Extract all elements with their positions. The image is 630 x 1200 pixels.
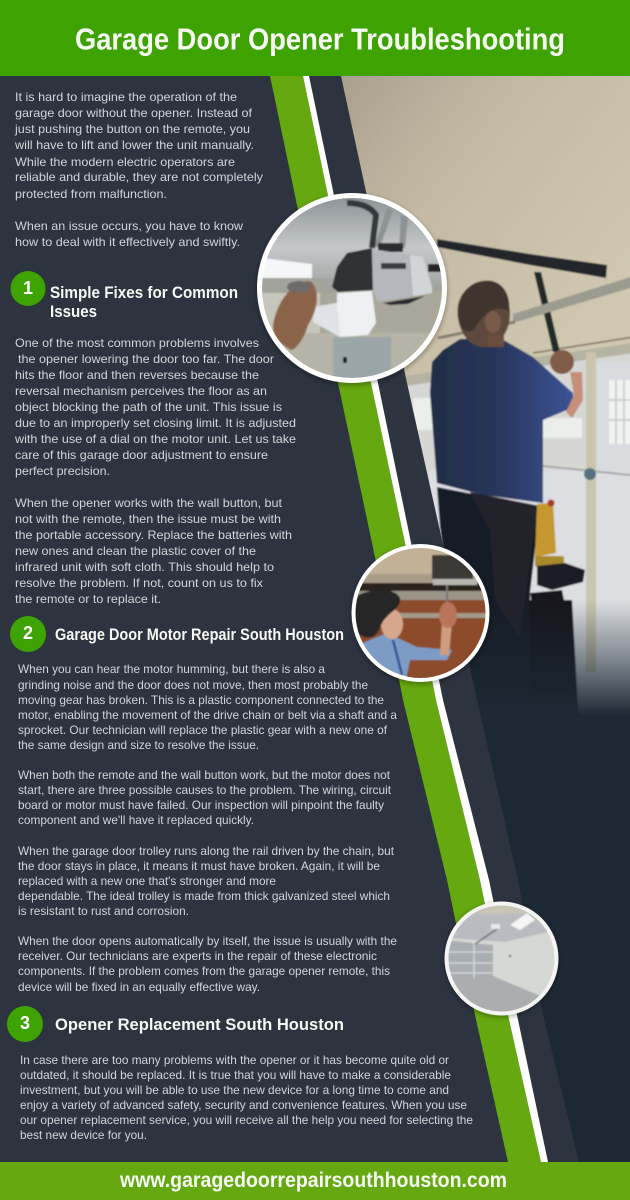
header bar bbox=[0, 0, 630, 76]
section 3 heading bbox=[7, 1006, 344, 1042]
section 3 body text: enjoy a variety of advanced safety, security and convenience features. When you use bbox=[20, 1098, 467, 1112]
section 1 body text: new ones and clean the plastic cover of the bbox=[15, 544, 256, 558]
section 1 body text: care of this garage door adjustment to ensure bbox=[15, 448, 268, 462]
section 2 body text: When the garage door trolley runs along the rail driven by the chain, but bbox=[18, 844, 395, 858]
section 3 body text: In case there are too many problems with the opener or it has become quite old or bbox=[20, 1053, 449, 1067]
section 1 body text: not with the remote, then the issue must be with bbox=[15, 512, 281, 526]
section 3 body text: investment, but you will be able to use the new device for a long time to come and bbox=[20, 1083, 449, 1097]
number badge 2: 2 bbox=[23, 623, 33, 643]
footer bar bbox=[0, 1162, 630, 1200]
heading text 1: Issues bbox=[50, 302, 97, 321]
section 1 body text: due to an improperly set closing limit. It is adjusted bbox=[15, 416, 296, 430]
intro text: just pushing the button on the remote, you bbox=[14, 122, 250, 136]
section 2 body text: When you can hear the motor humming, but there is also a bbox=[18, 662, 325, 676]
garage door rail bbox=[437, 239, 607, 278]
section 2 body text: the door stays in place, it means it must have broken. Again, it will be bbox=[18, 859, 380, 873]
intro text bbox=[14, 90, 263, 249]
section 1 body text: the remote or to replace it. bbox=[15, 592, 161, 606]
section 2 body text: grinding noise and the door does not move, then most probably the bbox=[18, 678, 368, 692]
number badge 3: 3 bbox=[20, 1013, 30, 1033]
section 1 body text: One of the most common problems involves bbox=[15, 336, 259, 350]
section 1 body text: reversal mechanism perceives the floor as an bbox=[15, 384, 267, 398]
section 2 body text: replaced with a new one that's stronger and more bbox=[18, 874, 276, 888]
section 2 body text: When both the remote and the wall button work, but the motor does not bbox=[18, 768, 391, 782]
tool belt bbox=[470, 492, 540, 640]
bottom fade over photo bbox=[470, 605, 630, 736]
section 1 heading bbox=[10, 271, 238, 321]
section 2 body text: device will be fixed in an equally effective way. bbox=[18, 980, 260, 994]
section 3 body text bbox=[20, 1053, 473, 1142]
white diagonal stripe bbox=[303, 76, 548, 1162]
green diagonal band bbox=[270, 76, 541, 1162]
photo circle 1: opener unit bbox=[250, 190, 455, 388]
forearm and hand bbox=[566, 372, 583, 418]
section 2 body text: is resistant to rust and corrosion. bbox=[18, 904, 189, 918]
intro text: garage door without the opener. Instead of bbox=[15, 106, 253, 120]
section 1 body text: object blocking the path of the unit. This issue is bbox=[15, 400, 282, 414]
section 1 body text: resolve the problem. If not, count on us to fix bbox=[15, 576, 263, 590]
section 1 body text: hits the floor and then reverses because the bbox=[15, 368, 259, 382]
number badge 1: 1 bbox=[23, 278, 33, 298]
ladder and pouches behind bbox=[528, 599, 578, 711]
section 3 body text: our opener replacement service, you will receive all the help you need for selecting the bbox=[20, 1113, 473, 1127]
shirt bbox=[430, 338, 574, 503]
section 3 body text: best new device for you. bbox=[20, 1128, 147, 1142]
photo: technician working on garage door opener bbox=[341, 76, 630, 711]
section 2 body text: receiver. Our technicians are experts in the repair of these electronic bbox=[18, 949, 377, 963]
intro text: will have to lift and lower the unit manually. bbox=[14, 138, 254, 152]
section 3 body text: outdated, it should be replaced. It is true that you will have to make a considerable bbox=[20, 1068, 451, 1082]
intro text: reliable and durable, they are not completely bbox=[15, 170, 263, 184]
photo circle 3: empty garage interior bbox=[440, 900, 565, 1020]
intro text: how to deal with it effectively and swiftly. bbox=[15, 235, 240, 249]
section 1 body text: When the opener works with the wall button, but bbox=[15, 496, 283, 510]
section 2 body text: components. If the problem comes from the garage opener remote, this bbox=[18, 964, 390, 978]
section 2 body text: sprocket. Our technician will replace the plastic gear with a new one of bbox=[18, 723, 388, 737]
heading text 3: Opener Replacement South Houston bbox=[55, 1016, 344, 1034]
section 1 body text: perfect precision. bbox=[15, 464, 110, 478]
section 1 body text: with the use of a dial on the motor unit. Let us take bbox=[14, 432, 296, 446]
section 2 body text: moving gear has broken. This is a plastic component connected to the bbox=[18, 693, 384, 707]
section 1 body text: the portable accessory. Replace the batteries with bbox=[15, 528, 292, 542]
intro text: It is hard to imagine the operation of the bbox=[15, 90, 237, 104]
section 2 body text: start, there are three possible causes to the problem. The wiring, circuit bbox=[18, 783, 392, 797]
section 1 body text: the opener lowering the door too far. The door bbox=[18, 352, 274, 366]
section 2 body text: motor, enabling the movement of the drive chain or belt via a shaft and a bbox=[18, 708, 397, 722]
section 2 heading bbox=[10, 616, 344, 652]
section 2 body text: dependable. The ideal trolley is made from thick galvanized steel which bbox=[18, 889, 390, 903]
section 2 body text: When the door opens automatically by itself, the issue is usually with the bbox=[18, 934, 397, 948]
section 1 body text: infrared unit with soft cloth. This should help to bbox=[15, 560, 274, 574]
intro text: While the modern electric operators are bbox=[15, 155, 235, 169]
photo circle 2: technician with blue shirt bbox=[350, 540, 492, 685]
number badge 1 bbox=[10, 271, 46, 306]
intro text: protected from malfunction. bbox=[15, 187, 167, 201]
trousers bbox=[436, 486, 538, 711]
number badge 3 bbox=[7, 1006, 43, 1042]
heading text 2: Garage Door Motor Repair South Houston bbox=[55, 626, 344, 644]
intro text: When an issue occurs, you have to know bbox=[15, 219, 243, 233]
section 2 body text bbox=[18, 662, 397, 994]
section 2 body text: the same design and size to resolve the issue. bbox=[18, 738, 259, 752]
heading text 1 bbox=[50, 283, 238, 321]
website url: www.garagedoorrepairsouthhouston.com bbox=[119, 1169, 507, 1192]
section 1 body text bbox=[14, 336, 296, 606]
section 2 body text: board or motor must have failed. Our inspection will pinpoint the faulty bbox=[18, 798, 384, 812]
heading text 1: Simple Fixes for Common bbox=[50, 283, 238, 302]
section 2 body text: component and we'll have it replaced quickly. bbox=[18, 813, 254, 827]
number badge 2 bbox=[10, 616, 46, 652]
title: Garage Door Opener Troubleshooting bbox=[75, 22, 565, 56]
head bbox=[458, 281, 510, 347]
